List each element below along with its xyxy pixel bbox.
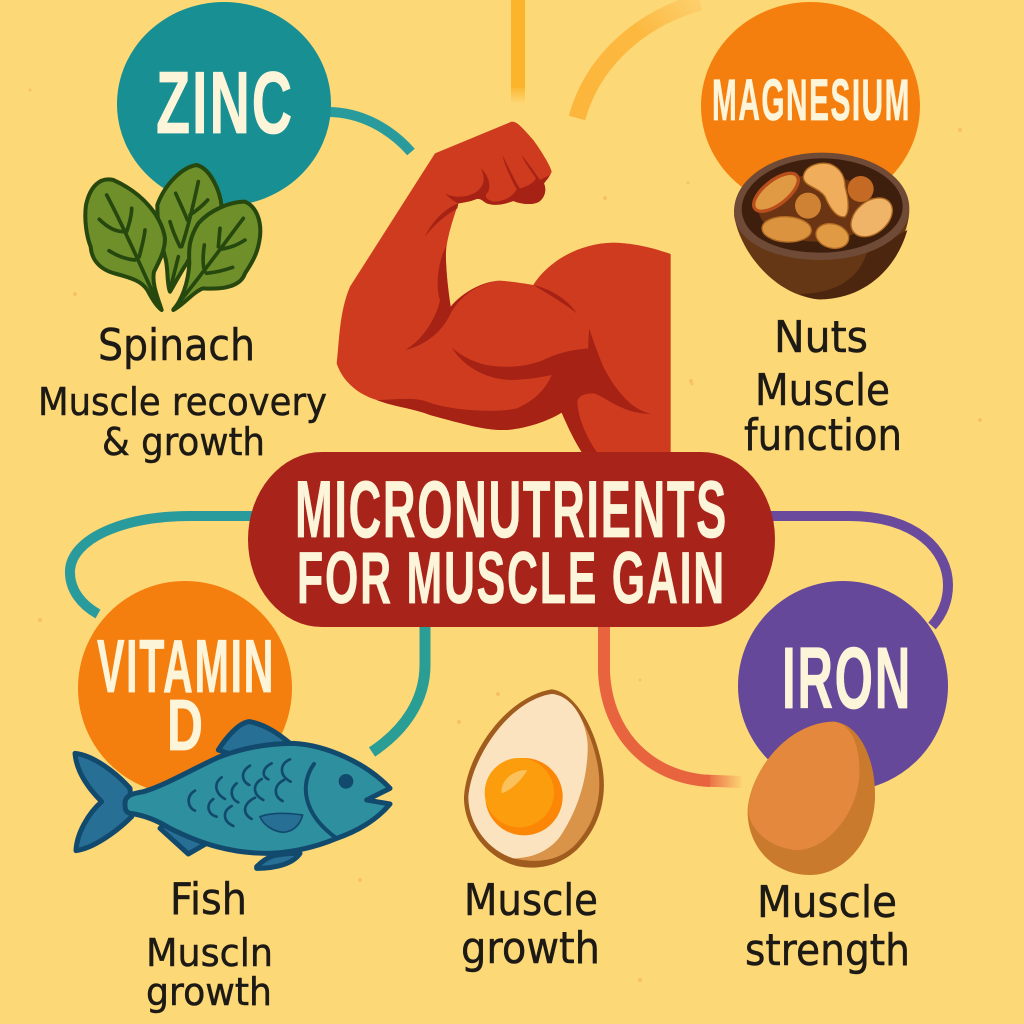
heading: vitamin: VITAMIN: [97, 624, 275, 708]
nuts: [748, 163, 900, 252]
circle: zinc: [117, 2, 331, 206]
description: iron benefit: strength: [745, 925, 910, 976]
label: spinach: Spinach: [98, 320, 255, 371]
description: egg benefit: Muscle: [464, 875, 598, 926]
description: zinc benefit: Muscle recovery: [38, 380, 327, 424]
connector: zinc to muscle: [328, 112, 411, 152]
connector: egg to title: [372, 627, 425, 752]
description: zinc benefit: [38, 380, 327, 464]
description: egg benefit: growth: [461, 923, 600, 974]
circle: iron: [738, 581, 948, 791]
bicep shading: [377, 155, 652, 452]
label: spinach: [38, 320, 327, 464]
heading: iron: IRON: [782, 630, 912, 727]
description: vitamin D benefit: growth: [146, 970, 272, 1014]
connector: gold line top: [511, 0, 525, 104]
description: iron benefit: Muscle: [757, 877, 897, 928]
label: fish: [146, 874, 273, 1014]
icon: spinach: [85, 165, 260, 310]
description: magnesium benefit: function: [744, 410, 902, 461]
label: nuts: [744, 312, 902, 461]
description: zinc benefit: & growth: [102, 420, 265, 464]
description: magnesium benefit: [744, 365, 902, 461]
icon: brown egg: [748, 722, 875, 875]
connector: gold curve top: [577, 2, 700, 118]
description: iron benefit: [745, 877, 910, 976]
title banner: [248, 452, 775, 627]
heading: line 2: FOR MUSCLE GAIN: [297, 538, 726, 619]
label: nuts: Nuts: [774, 312, 868, 363]
description: egg benefit: [461, 875, 600, 974]
icon: bowl of nuts: [734, 153, 909, 299]
icon: fish: [75, 722, 390, 868]
description: magnesium benefit: Muscle: [755, 365, 890, 416]
connector: title to brown egg: [604, 627, 710, 781]
heading: D: D: [167, 686, 205, 766]
connector: vitamin D to title: [70, 516, 252, 614]
icon: halved egg: [464, 689, 604, 868]
label: fish: Fish: [170, 874, 247, 925]
description: vitamin D benefit: Muscln: [146, 931, 273, 975]
circle: magnesium: [701, 2, 920, 210]
connector: gold line top solid: [511, 0, 525, 88]
connector: fading end: [705, 781, 743, 782]
circle: vitamin D: [78, 581, 292, 795]
description: vitamin D benefit: [146, 931, 273, 1014]
heading: zinc: ZINC: [156, 53, 294, 152]
icon: flexed bicep: [337, 122, 671, 452]
connector: iron to title: [771, 516, 948, 626]
